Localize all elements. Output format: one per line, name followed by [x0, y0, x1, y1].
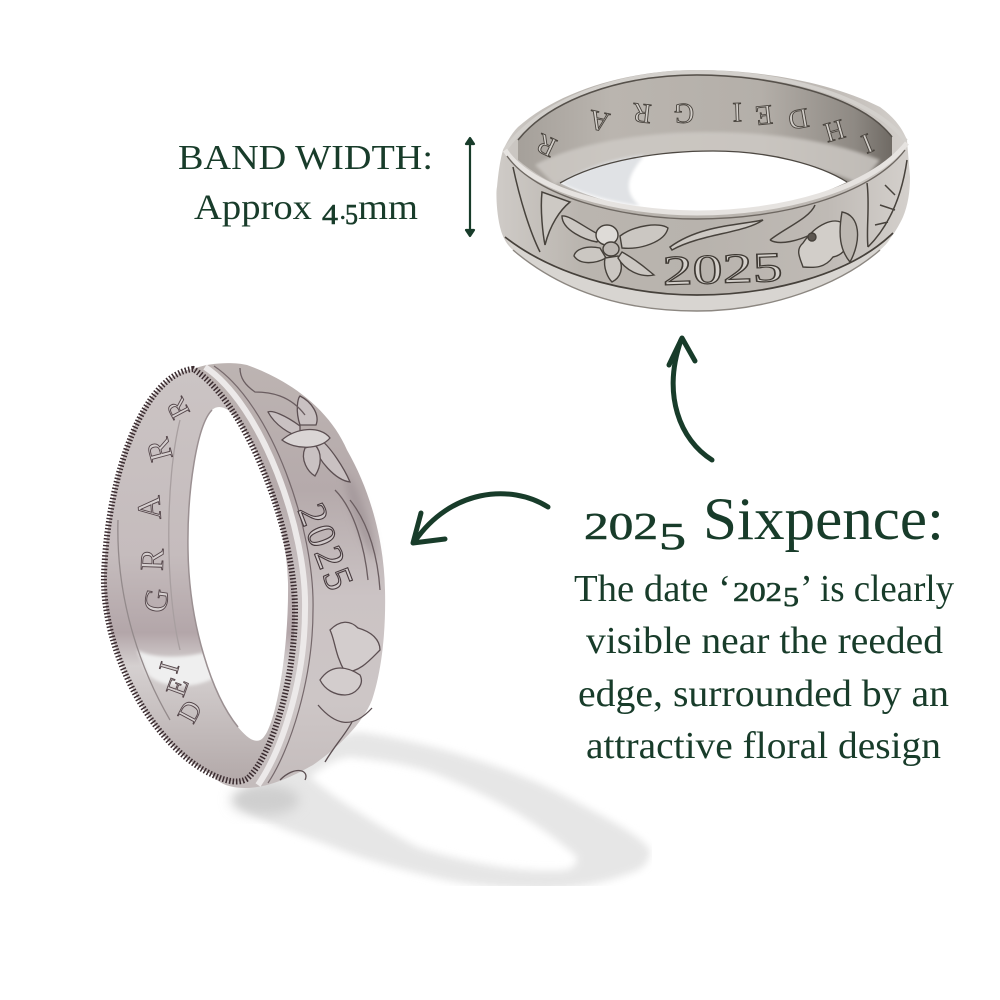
band date 2025: 2025	[662, 245, 783, 295]
band width label: Approx	[194, 187, 312, 227]
description text: is clearly	[820, 568, 954, 610]
inner engraved lettering: E	[754, 98, 774, 131]
description text: attractive floral design	[586, 725, 941, 767]
heading: 2025 Sixpence: 5	[659, 516, 686, 558]
top ring inner surface	[518, 75, 892, 214]
left ring inner surface	[104, 369, 295, 782]
heading: 2025 Sixpence	[584, 486, 944, 558]
leaf strokes of top ring	[513, 160, 907, 252]
band width label: BAND WIDTH:	[178, 138, 433, 177]
hole of top ring	[560, 151, 847, 213]
description text	[574, 568, 954, 767]
description text: ’	[800, 568, 813, 610]
description text: 5	[783, 582, 799, 612]
ring shadow on the ground	[231, 732, 650, 889]
floral relief: narcissus	[562, 216, 668, 282]
inner surface lighter zone	[535, 132, 880, 185]
inner engraved lettering left: R	[160, 392, 197, 424]
left band dark smudge	[345, 470, 375, 560]
inner engraved lettering: R	[631, 96, 653, 129]
description text: 202	[733, 577, 782, 607]
reeded edge loop	[104, 369, 295, 782]
inner engraved lettering left: G	[138, 586, 177, 615]
left ring silhouette	[105, 363, 385, 788]
front upper lip	[505, 143, 907, 213]
description text: The date ‘	[574, 568, 731, 610]
inner engraved lettering left: D	[172, 696, 209, 728]
inner engraved lettering left	[131, 392, 209, 728]
top ring photo	[496, 70, 910, 311]
second flower	[799, 212, 858, 267]
inner engraved lettering: D	[786, 101, 811, 135]
band date 2025 left: 2025	[289, 497, 364, 599]
inner engraved lettering left: I	[154, 659, 186, 676]
hole of left ring	[188, 407, 288, 741]
lower rim	[505, 233, 893, 311]
inner engraved lettering: G	[674, 97, 694, 128]
inner engraved lettering left: R	[135, 548, 171, 571]
heading: 2025 Sixpence: Sixpence:	[703, 486, 944, 552]
inner engraved lettering: A	[585, 103, 612, 138]
inner engraved lettering: I	[857, 127, 877, 159]
top rim highlight	[505, 72, 906, 150]
inner engraved lettering: H	[820, 112, 848, 148]
inner engraved lettering left: R	[140, 434, 181, 465]
double-headed arrow: band width	[466, 138, 474, 236]
inner engraved lettering: R	[531, 127, 561, 163]
arrow: left to left ring	[413, 494, 548, 543]
flower relief left	[268, 396, 350, 482]
lower flower left	[280, 622, 380, 780]
left ring photo	[104, 363, 385, 788]
description text: edge, surrounded by an	[578, 673, 949, 715]
inner engraved lettering left: E	[161, 674, 196, 700]
inner engraved lettering left: A	[131, 494, 169, 521]
band width label: mm	[358, 187, 418, 227]
band width label: 4	[322, 199, 339, 231]
inner engraved lettering: I	[732, 96, 742, 127]
band width label	[178, 138, 433, 231]
description text: visible near the reeded	[586, 620, 943, 662]
inner engraved lettering	[531, 96, 877, 163]
band width label: .	[339, 193, 346, 226]
front face ridge	[205, 367, 305, 785]
band width label: 5	[345, 199, 358, 231]
arrow: up to top ring	[669, 338, 712, 460]
top ring silhouette	[496, 70, 910, 311]
left ring inner highlights	[137, 650, 224, 686]
leaf strokes left	[240, 368, 380, 590]
heading: 2025 Sixpence: 202	[584, 506, 658, 548]
